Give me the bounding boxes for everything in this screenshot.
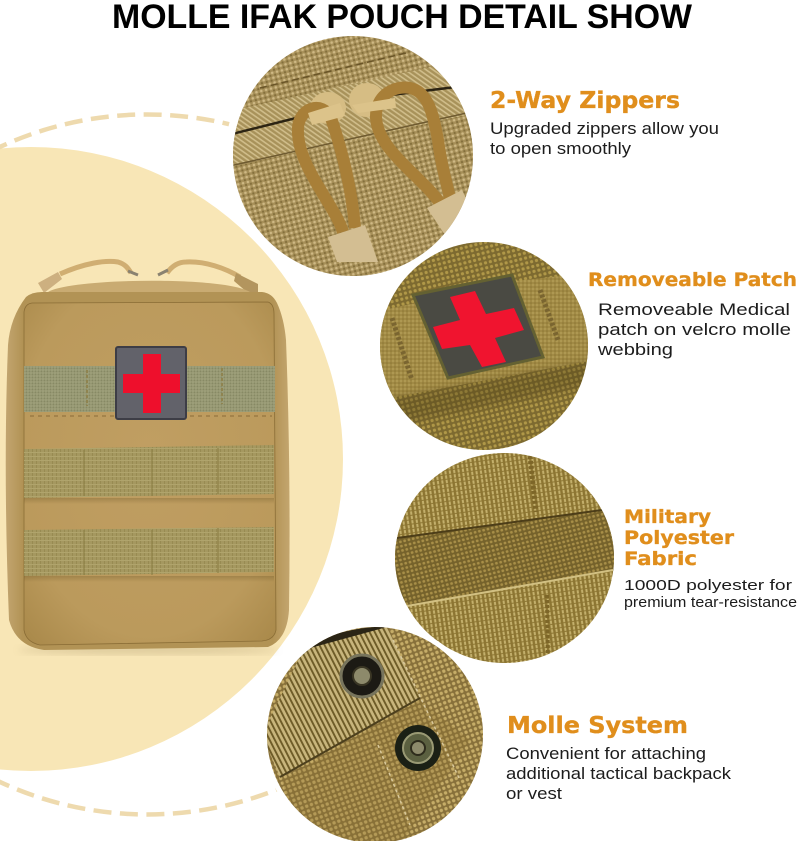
velcro strip <box>24 366 275 412</box>
snap button upper <box>341 655 383 697</box>
pouch zipper handles <box>38 261 258 293</box>
cord end caps <box>328 225 378 262</box>
velcro band <box>380 276 588 398</box>
molle feature text: Molle System <box>507 713 688 739</box>
molle webbing lower <box>24 527 274 582</box>
zipper pull discs <box>310 92 346 124</box>
molle feature text: additional tactical backpack <box>506 764 732 783</box>
patch feature text: webbing <box>597 340 673 359</box>
fabric feature text: Fabric <box>624 548 697 570</box>
background cream circle <box>0 147 343 771</box>
detail circle: removable patch <box>375 238 595 454</box>
pouch top gusset <box>34 281 262 300</box>
zipper feature text: to open smoothly <box>490 139 632 158</box>
patch feature text: Removeable Medical <box>598 300 790 319</box>
snap button lower <box>395 725 441 771</box>
pouch shadow <box>18 646 278 654</box>
right paracord loop <box>376 87 450 203</box>
zipper feature text <box>490 88 719 158</box>
fabric feature text: premium tear-resistance <box>624 594 797 611</box>
fabric feature text: Polyester <box>624 527 735 549</box>
fabric feature text: 1000D polyester for <box>624 577 792 594</box>
fabric feature text <box>624 506 797 611</box>
lower shade <box>282 700 470 841</box>
fabric feature text: Military <box>624 506 712 528</box>
main pouch photo <box>6 261 290 654</box>
recessed fabric band <box>390 510 620 606</box>
pouch front panel <box>24 302 276 645</box>
patch feature text <box>588 269 797 359</box>
medical patch <box>116 347 186 419</box>
band shadow <box>390 360 595 425</box>
left paracord loop <box>298 108 355 232</box>
zipper feature text: 2-Way Zippers <box>490 88 680 114</box>
patch feature text: Removeable Patch <box>588 269 797 291</box>
patch feature text: patch on velcro molle <box>598 320 791 339</box>
red cross <box>433 291 524 367</box>
molle feature text: Convenient for attaching <box>506 744 706 763</box>
molle feature text <box>506 713 732 803</box>
zipper tape <box>233 66 461 148</box>
molle webbing upper <box>24 445 274 504</box>
zipper pull tabs <box>308 106 345 125</box>
pouch body <box>6 292 290 650</box>
webbing flap <box>262 627 420 777</box>
detail circle: zippers <box>225 28 481 284</box>
dashed arc around cream circle <box>0 114 290 814</box>
detail circle: polyester fabric <box>390 449 620 667</box>
patch base <box>413 275 543 378</box>
molle feature text: or vest <box>506 784 562 803</box>
detail circle: molle system <box>262 622 488 841</box>
zipper feature text: Upgraded zippers allow you <box>490 119 719 138</box>
top shadow <box>302 627 385 656</box>
